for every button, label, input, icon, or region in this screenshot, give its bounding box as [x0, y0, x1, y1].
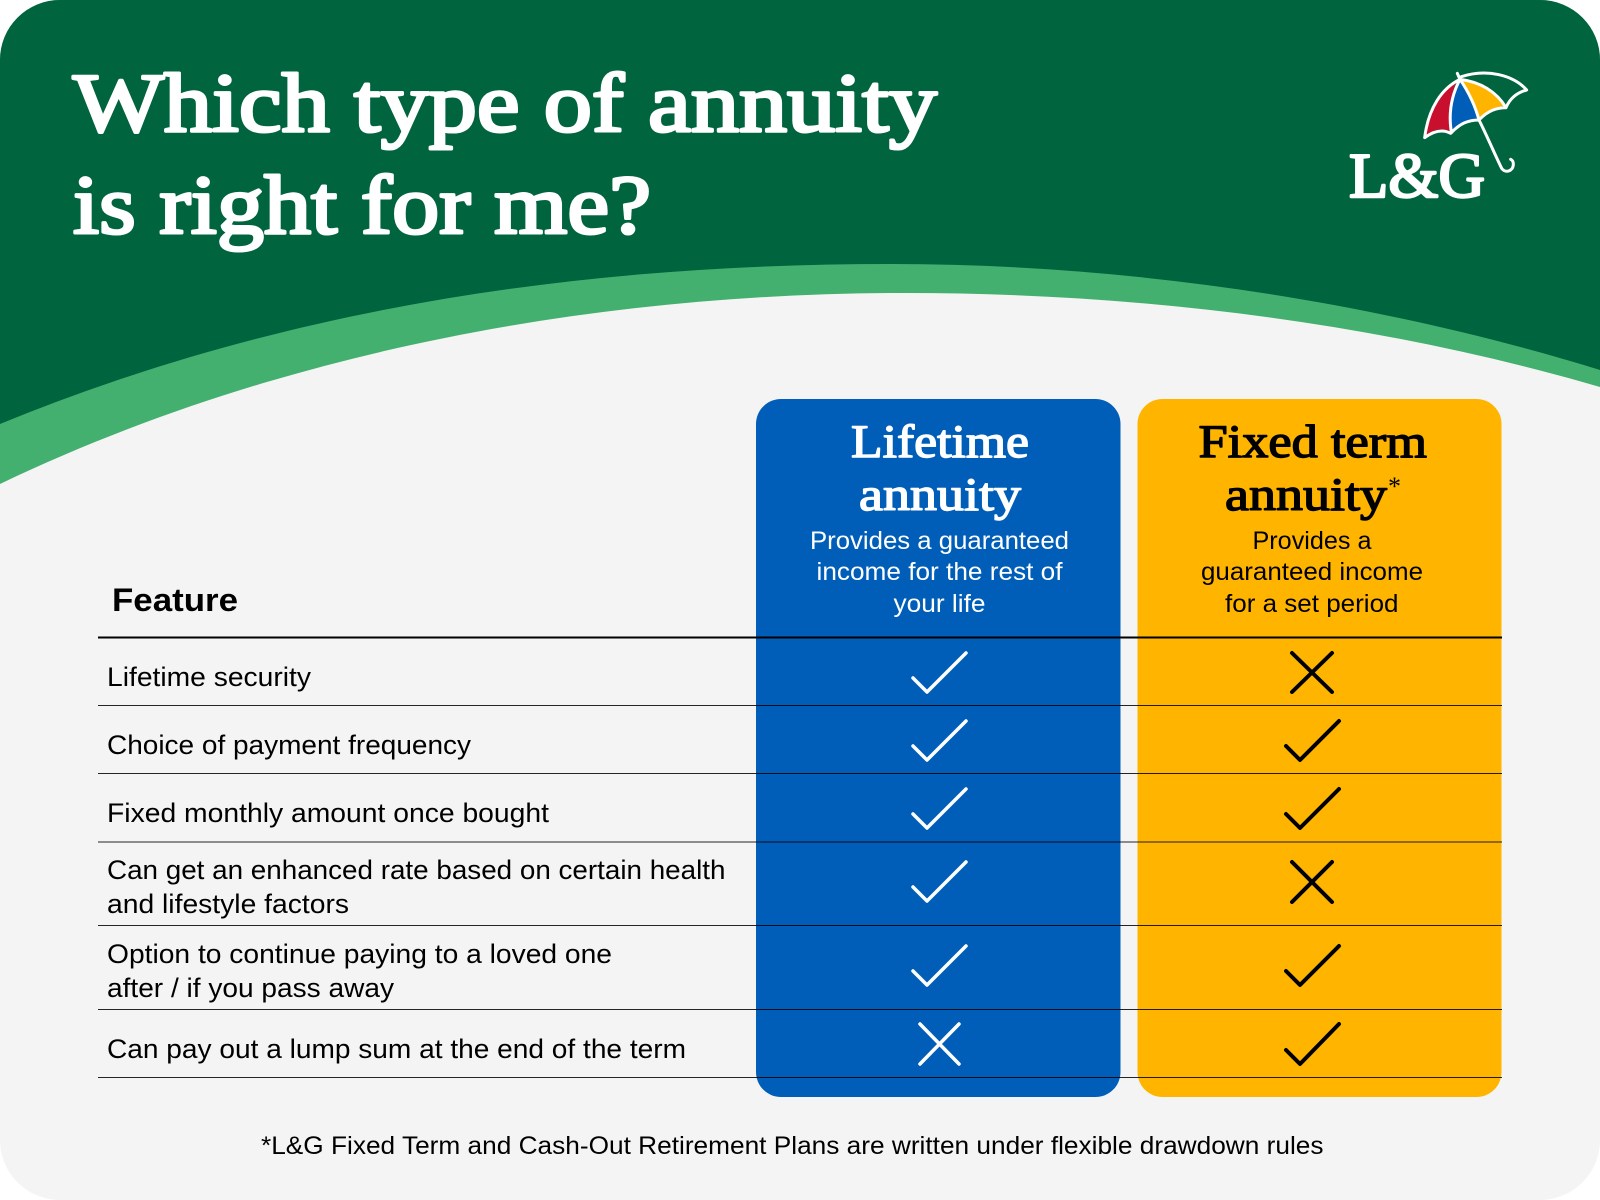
feature labels: Fixed monthly amount once bought	[107, 798, 550, 828]
heading: fixed term annuity	[1198, 416, 1427, 521]
title: Which type of annuity	[73, 57, 937, 150]
lifetime description: income for the rest of	[816, 558, 1063, 586]
heading: fixed term annuity: annuity	[1225, 469, 1388, 521]
fixed term annuity marks	[1286, 653, 1339, 1064]
logo: L&G umbrella	[1349, 73, 1527, 211]
title	[73, 57, 937, 252]
logo: L&G umbrella: L&G	[1349, 140, 1485, 211]
lifetime description: your life	[894, 590, 986, 618]
feature labels: Can get an enhanced rate based on certain health	[107, 855, 726, 885]
fixed term description: Provides a	[1252, 527, 1372, 555]
feature labels: after / if you pass away	[107, 973, 395, 1003]
feature labels: and lifestyle factors	[107, 889, 349, 919]
fixed term description	[1201, 527, 1423, 618]
heading: fixed term annuity: Fixed term	[1198, 416, 1427, 468]
feature labels: Option to continue paying to a loved one	[107, 939, 612, 969]
panel: fixed term annuity column	[1138, 399, 1502, 1097]
lifetime description: Provides a guaranteed	[810, 527, 1069, 555]
fixed term description: guaranteed income	[1201, 558, 1423, 586]
feature labels: Can pay out a lump sum at the end of the term	[107, 1034, 686, 1064]
panel: lifetime annuity column	[756, 399, 1120, 1097]
heading: fixed term annuity: *	[1388, 472, 1401, 501]
feature labels	[107, 662, 726, 1064]
feature labels: Choice of payment frequency	[107, 730, 472, 760]
heading: lifetime annuity: annuity	[859, 469, 1022, 521]
table rules	[98, 638, 1502, 1078]
lifetime description	[810, 527, 1069, 618]
feature column heading: Feature	[112, 582, 238, 618]
footnote: *L&G Fixed Term and Cash-Out Retirement Plans are written under flexible drawdown rules	[261, 1132, 1324, 1160]
heading: lifetime annuity	[851, 416, 1029, 521]
heading: lifetime annuity: Lifetime	[851, 416, 1029, 468]
title: is right for me?	[73, 159, 651, 252]
feature labels: Lifetime security	[107, 662, 312, 692]
lifetime annuity marks	[913, 653, 966, 1064]
fixed term description: for a set period	[1225, 590, 1398, 618]
